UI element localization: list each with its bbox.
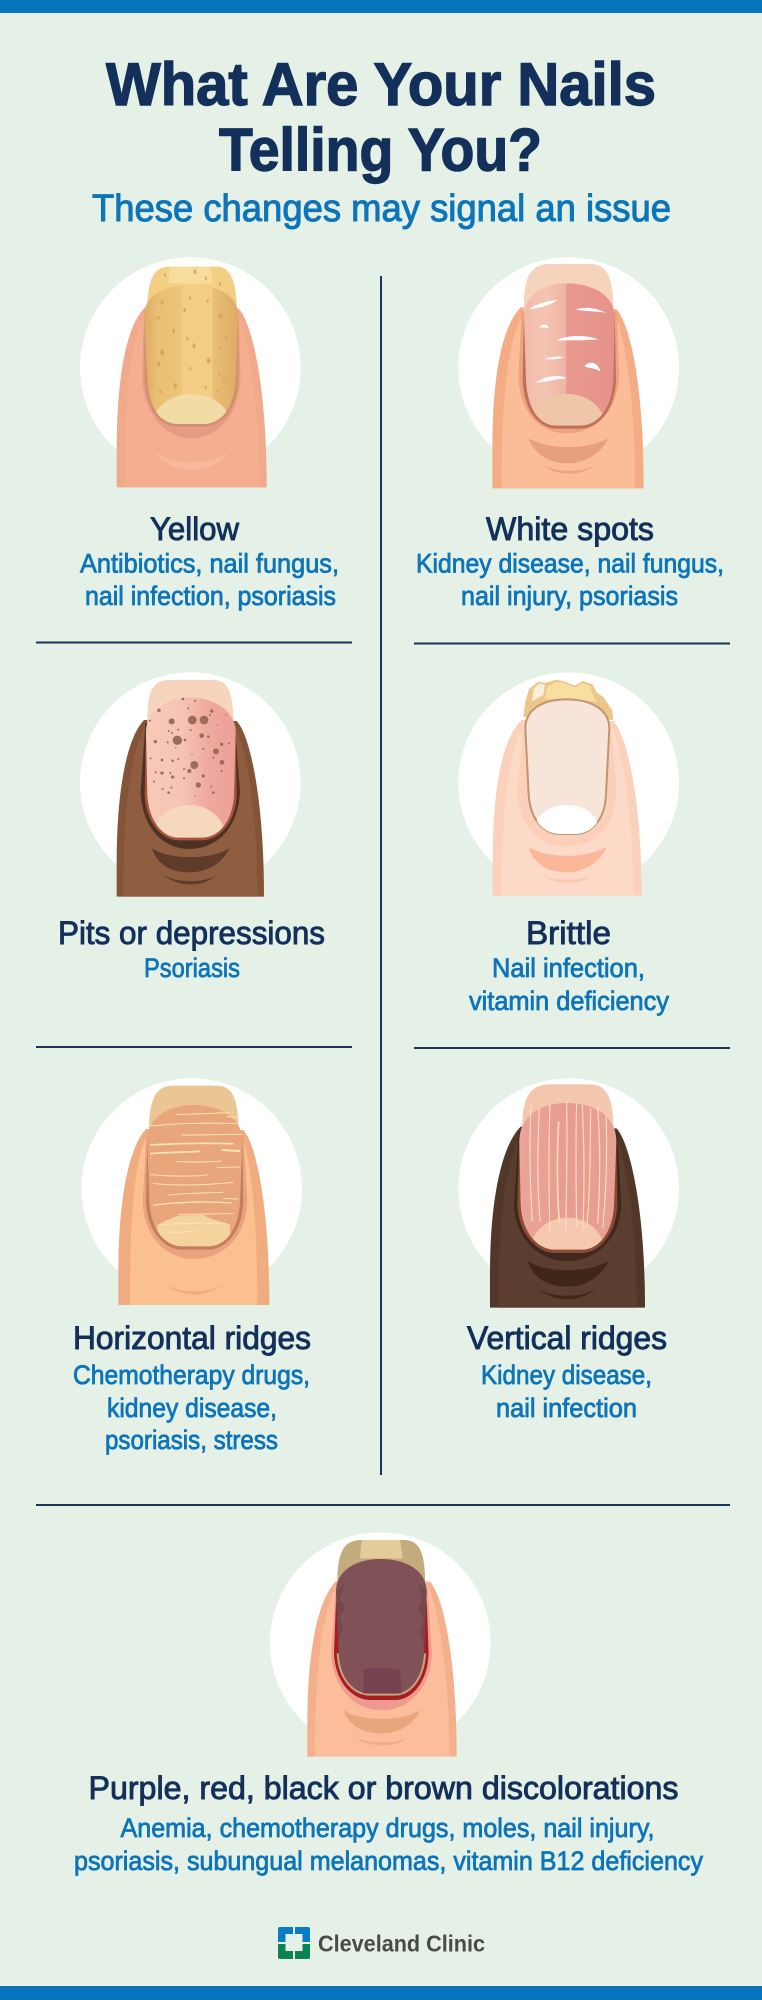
panel: horizontal ridges	[73, 1078, 311, 1455]
title	[106, 51, 656, 184]
text: horizontal ridges causes: Chemotherapy drugs,	[73, 1360, 310, 1390]
text: brittle causes: Nail infection,	[492, 953, 645, 983]
icon: Cleveland Clinic cross	[278, 1927, 310, 1959]
text: yellow causes	[80, 548, 339, 611]
panel: vertical ridges	[458, 1078, 679, 1423]
top bar	[0, 0, 762, 13]
heading: horizontal ridges: Horizontal ridges	[73, 1320, 311, 1356]
text: horizontal ridges causes: psoriasis, stress	[105, 1425, 278, 1455]
text: horizontal ridges causes	[73, 1360, 310, 1455]
bottom bar	[0, 1986, 762, 2000]
heading: yellow: Yellow	[150, 511, 240, 547]
heading: discolorations: Purple, red, black or brown discolorations	[88, 1770, 678, 1806]
text: brittle causes: vitamin deficiency	[469, 986, 669, 1016]
panel: yellow	[80, 257, 339, 611]
icon: horizontal ridges nail	[81, 1078, 302, 1305]
text: brittle causes	[469, 953, 669, 1016]
text: discoloration causes: Anemia, chemotherapy drugs, moles, nail injury,	[120, 1813, 654, 1843]
icon: brittle nail	[458, 672, 679, 896]
panel: brittle	[458, 672, 679, 1016]
icon: discolored nail	[270, 1532, 491, 1757]
icon: yellow nail	[80, 257, 301, 487]
title: Telling You?	[219, 116, 542, 184]
logo: Cleveland Clinic	[278, 1927, 485, 1959]
panel: white spots	[416, 257, 724, 611]
text: yellow causes: Antibiotics, nail fungus,	[80, 548, 339, 578]
text: vertical ridges causes: Kidney disease,	[481, 1360, 652, 1390]
heading: vertical ridges: Vertical ridges	[467, 1320, 667, 1356]
icon: pitted nail	[80, 672, 301, 897]
subtitle: These changes may signal an issue	[92, 188, 671, 230]
text: pits causes: Psoriasis	[144, 953, 240, 983]
heading: pits or depressions: Pits or depressions	[58, 915, 325, 951]
text: yellow causes: nail infection, psoriasis	[85, 581, 336, 611]
text: white spots causes	[416, 548, 724, 611]
heading: white spots: White spots	[486, 511, 654, 547]
text: discoloration causes	[74, 1813, 703, 1876]
heading: brittle: Brittle	[526, 915, 611, 951]
text: discoloration causes: psoriasis, subungual melanomas, vitamin B12 deficiency	[74, 1846, 703, 1876]
text: Cleveland Clinic: Cleveland Clinic	[318, 1930, 485, 1956]
text: white spots causes: nail injury, psoriasis	[461, 581, 678, 611]
icon: white spots nail	[458, 257, 679, 488]
panel: discolorations	[74, 1532, 703, 1876]
text: vertical ridges causes	[481, 1360, 652, 1423]
text: white spots causes: Kidney disease, nail fungus,	[416, 548, 724, 578]
panel: pits or depressions	[58, 672, 325, 983]
text: horizontal ridges causes: kidney disease,	[107, 1393, 277, 1423]
text: vertical ridges causes: nail infection	[496, 1393, 637, 1423]
title: What Are Your Nails	[106, 51, 656, 118]
icon: vertical ridges nail	[458, 1078, 679, 1308]
